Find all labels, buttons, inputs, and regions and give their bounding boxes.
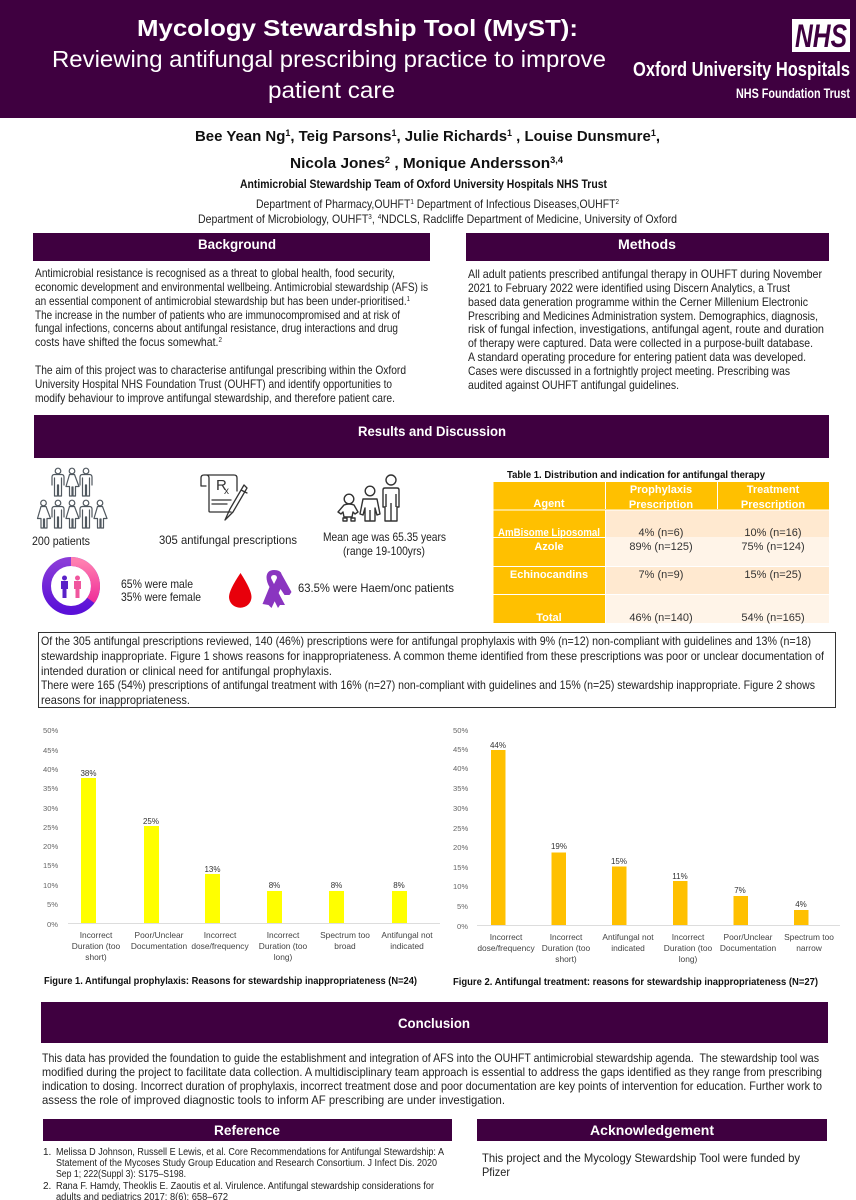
chart: figure 2 treatment: [453, 726, 840, 988]
panel: acknowledgement: [477, 1119, 827, 1179]
conclusion text: assess the role of improved diagnostic tools to inform AF prescribing are under investigation.: [42, 1094, 505, 1107]
methods text: A standard operating procedure for entering patient data was developed.: [468, 351, 806, 364]
y axis labels: 30%: [453, 804, 468, 813]
value labels: 7%: [734, 886, 746, 895]
category labels: Incorrect: [204, 930, 237, 940]
y axis labels: 5%: [457, 902, 468, 911]
icon: sex split donut: [46, 562, 96, 610]
table cells: 15% (n=25): [744, 569, 802, 581]
table cells: Prescription: [629, 499, 693, 511]
stat: sex split: 65% were male: [121, 578, 193, 591]
reference list: 1.: [43, 1147, 51, 1158]
methods text: Cases were discussed in a fortnightly project meeting. Prescribing was: [468, 365, 790, 378]
y axis labels: 25%: [453, 824, 468, 833]
value labels: 15%: [611, 857, 627, 866]
authors and affiliations: , Monique Andersson: [390, 155, 550, 172]
y axis labels: 15%: [43, 861, 58, 870]
category labels: short): [555, 954, 577, 964]
y axis labels: 50%: [453, 726, 468, 735]
category labels: broad: [334, 941, 356, 951]
poster title: [52, 15, 606, 103]
background text: economic development and environmental wellbeing. Antimicrobial stewardship (AFS) is: [35, 281, 428, 294]
value labels: 8%: [393, 881, 405, 890]
authors and affiliations: ,: [656, 128, 660, 145]
acknowledgement heading: [477, 1119, 827, 1141]
results and discussion heading: [34, 415, 829, 458]
authors and affiliations: 1: [651, 128, 656, 138]
conclusion heading: [41, 1002, 828, 1043]
acknowledgement text: [482, 1152, 800, 1179]
reference list: Statement of the Mycoses Study Group Education and Research Consortium. J Infect Dis. 2020: [56, 1158, 437, 1169]
authors and affiliations: 3,4: [550, 155, 563, 165]
reference heading: Reference: [214, 1123, 280, 1138]
background text: The aim of this project was to characterise antifungal prescribing within the Oxford: [35, 364, 406, 377]
category labels: indicated: [611, 943, 645, 953]
stat: mean age: (range 19-100yrs): [343, 545, 425, 558]
category labels: Spectrum too: [784, 932, 834, 942]
y axis labels: 40%: [43, 765, 58, 774]
stat: mean age: Mean age was 65.35 years: [323, 531, 446, 544]
table cells: Total: [536, 612, 562, 624]
authors and affiliations: Department of Infectious Diseases,OUHFT: [414, 198, 615, 211]
panel: background: [33, 233, 430, 405]
y axis labels: 30%: [43, 804, 58, 813]
poster title: patient care: [268, 77, 395, 103]
icon: group of patients: [38, 468, 107, 528]
background text: an essential component of antimicrobial stewardship but has been under-prioritised.: [35, 295, 464, 308]
category labels: Incorrect: [672, 932, 705, 942]
acknowledgement heading: Acknowledgement: [590, 1123, 715, 1138]
category labels: Poor/Unclear: [724, 932, 773, 942]
table cells: [494, 482, 829, 624]
value labels: 8%: [269, 881, 280, 890]
authors and affiliations: 2: [615, 199, 619, 206]
value labels: [490, 741, 807, 909]
stat: haem/onc patients: 63.5% were Haem/onc patients: [298, 582, 454, 595]
y axis labels: [43, 726, 58, 929]
background text: fungal infections, concerns about antifungal resistance, drug interactions and drug: [35, 322, 398, 335]
category labels: narrow: [796, 943, 823, 953]
conclusion text: [42, 1052, 822, 1107]
methods text: of therapy were captured. Data were collected in a purpose-built database.: [468, 337, 813, 350]
category labels: long): [679, 954, 698, 964]
table cells: 7% (n=9): [639, 569, 683, 581]
value labels: 13%: [204, 865, 221, 874]
NHS logo: [633, 18, 850, 101]
background text: 1: [407, 296, 410, 303]
authors and affiliations: 1: [410, 199, 414, 206]
authors and affiliations: ,: [372, 213, 378, 226]
authors and affiliations: Nicola Jones: [290, 155, 383, 172]
methods heading: [466, 233, 829, 261]
methods text: [468, 268, 824, 392]
authors and affiliations: , Teig Parsons: [290, 128, 391, 145]
background text: The increase in the number of patients who are immunocompromised and at risk of: [35, 309, 401, 322]
icon: prescription and pen: [201, 475, 247, 520]
authors and affiliations: Department of Microbiology, OUHFT: [198, 213, 385, 226]
poster title: Reviewing antifungal prescribing practice to improve: [52, 46, 606, 72]
background heading: [33, 233, 430, 261]
table cells: Agent: [533, 498, 565, 510]
category labels: dose/frequency: [477, 943, 535, 953]
authors and affiliations: , Louise Dunsmure: [512, 128, 651, 145]
authors and affiliations: 1: [391, 128, 396, 138]
category labels: Duration (too: [542, 943, 591, 953]
category labels: Documentation: [131, 941, 188, 951]
table cells: Azole: [534, 541, 564, 553]
icon: child, youth and adult figures: [338, 475, 399, 521]
stat: 200 patients: 200 patients: [32, 535, 90, 548]
icon: blood drop: [229, 573, 252, 608]
category labels: Incorrect: [550, 932, 583, 942]
category labels: dose/frequency: [191, 941, 249, 951]
panel: reference: [43, 1119, 452, 1200]
category labels: Duration (too: [72, 941, 121, 951]
panel: methods: [466, 233, 829, 392]
chart: figure 1 prophylaxis: [43, 726, 440, 987]
category labels: Antifungal not: [381, 930, 433, 940]
category labels: Spectrum too: [320, 930, 370, 940]
y axis labels: 20%: [43, 842, 58, 851]
methods text: audited against OUHFT antifungal guidelines.: [468, 379, 679, 392]
category labels: Incorrect: [80, 930, 113, 940]
y axis labels: 35%: [453, 784, 468, 793]
y axis labels: 10%: [43, 881, 58, 890]
y axis labels: 0%: [457, 922, 468, 931]
poster title: Mycology Stewardship Tool (MyST):: [137, 15, 578, 41]
y axis labels: 50%: [43, 726, 58, 735]
results summary box: intended duration or clinical need for antifungal prophylaxis.: [41, 665, 332, 678]
stat: prescriptions: 305 antifungal prescriptions: [159, 534, 297, 547]
authors and affiliations: NDCLS, Radcliffe Department of Medicine, University of Oxford: [381, 213, 677, 226]
methods text: based data generation programme within the Cerner Millenium Electronic: [468, 296, 808, 309]
background text: Antimicrobial resistance is recognised as a threat to global health, food security,: [35, 267, 395, 280]
y axis labels: 5%: [47, 900, 58, 909]
methods heading: Methods: [618, 237, 676, 252]
stat: prescriptions: R: [216, 477, 227, 494]
category labels: Documentation: [720, 943, 777, 953]
category labels: Duration (too: [664, 943, 713, 953]
y axis labels: 20%: [453, 843, 468, 852]
results summary box: Of the 305 antifungal prescriptions reviewed, 140 (46%) prescriptions were for antifungal prophylaxis with 9% (n=12) non-compliant with guidelines and 13% (n=18): [41, 635, 811, 648]
y axis labels: 45%: [453, 745, 468, 754]
stat: prescriptions: [159, 475, 297, 547]
results summary box: reasons for inappropriateness.: [41, 694, 190, 707]
category labels: indicated: [390, 941, 424, 951]
category labels: Antifungal not: [602, 932, 654, 942]
value labels: 8%: [331, 881, 342, 890]
background text: 2: [218, 337, 222, 344]
y axis labels: 0%: [47, 920, 58, 929]
table cells: Treatment: [747, 484, 800, 496]
y axis labels: 25%: [43, 823, 58, 832]
background text: University Hospital NHS Foundation Trust (OUHFT) and identify opportunities to: [35, 378, 392, 391]
stat: sex split: 35% were female: [121, 591, 201, 604]
conclusion text: indication to dosing. Incorrect duration of prophylaxis, incorrect treatment dose and poor documentation are key points of intervention for education. Further work to: [42, 1080, 822, 1093]
table cells: 10% (n=16): [744, 527, 802, 539]
conclusion heading: Conclusion: [398, 1016, 470, 1031]
y axis labels: 15%: [453, 863, 468, 872]
acknowledgement text: Pfizer: [482, 1166, 510, 1179]
reference list: 2.: [43, 1181, 51, 1192]
table cells: Prescription: [741, 499, 805, 511]
y axis labels: [453, 726, 468, 931]
category labels: Incorrect: [490, 932, 523, 942]
y axis labels: 10%: [453, 882, 468, 891]
authors and affiliations: 4: [378, 214, 381, 221]
table 1: [494, 469, 829, 624]
authors and affiliations: , Julie Richards: [396, 128, 507, 145]
reference list: [43, 1147, 444, 1200]
authors and affiliations: 2: [385, 155, 390, 165]
authors and affiliations: 1: [285, 128, 290, 138]
category labels: Poor/Unclear: [135, 930, 184, 940]
reference list: Sep 1; 222(Suppl 3): S175–S198.: [56, 1169, 186, 1180]
authors and affiliations: Department of Pharmacy,OUHFT: [256, 198, 427, 211]
stat: sex split: [46, 562, 201, 610]
reference heading: [43, 1119, 452, 1141]
y axis labels: 45%: [43, 746, 58, 755]
background text: [35, 267, 428, 405]
figure 2 caption: Figure 2. Antifungal treatment: reasons for stewardship inappropriateness (N=27): [453, 977, 818, 988]
table title: Table 1. Distribution and indication for antifungal therapy: [507, 469, 765, 481]
y axis labels: 35%: [43, 784, 58, 793]
panel: conclusion: [41, 1002, 828, 1107]
value labels: 38%: [80, 769, 97, 778]
icon: purple ribbon: [262, 570, 292, 608]
table cells: 54% (n=165): [741, 612, 805, 624]
value labels: 25%: [143, 817, 159, 826]
bars: [81, 778, 407, 923]
category labels: Incorrect: [267, 930, 300, 940]
background text: modify behaviour to improve antifungal stewardship, and therefore patient care.: [35, 392, 395, 405]
methods text: 2021 to February 2022 were identified using Discern Analytics, a Trust: [468, 282, 791, 295]
category labels: [72, 930, 433, 962]
authors and affiliations: 1: [507, 128, 512, 138]
table cells: 75% (n=124): [741, 541, 805, 553]
bars: [491, 750, 808, 925]
methods text: Prescribing and Medicines Administration system. Demographics, diagnosis,: [468, 310, 818, 323]
acknowledgement text: This project and the Mycology Stewardship Tool were funded by: [482, 1152, 800, 1165]
results and discussion heading: Results and Discussion: [358, 424, 506, 439]
category labels: Duration (too: [259, 941, 308, 951]
category labels: [477, 932, 834, 964]
category labels: short): [85, 952, 107, 962]
methods text: risk of fungal infection, investigations, antifungal agent, route and duration: [468, 323, 824, 336]
value labels: [80, 769, 405, 890]
stat: prescriptions: x: [224, 486, 229, 497]
background text: costs have shifted the focus somewhat.: [35, 336, 237, 349]
table cells: 46% (n=140): [629, 612, 693, 624]
reference list: Rana F. Hamdy, Theoklis E. Zaoutis et al. Virulence. Antifungal stewardship considerations for: [56, 1181, 435, 1192]
header banner: [0, 0, 856, 118]
reference list: Melissa D Johnson, Russell E Lewis, et al. Core Recommendations for Antifungal Stewardship: A: [56, 1147, 444, 1158]
background heading: Background: [198, 237, 276, 252]
table cells: 4% (n=6): [639, 527, 683, 539]
value labels: 19%: [551, 842, 567, 851]
value labels: 4%: [795, 900, 807, 909]
authors and affiliations: [195, 128, 677, 226]
stat: mean age: [323, 475, 446, 558]
value labels: 11%: [672, 872, 688, 881]
y axis labels: 40%: [453, 764, 468, 773]
authors and affiliations: Antimicrobial Stewardship Team of Oxford University Hospitals NHS Trust: [240, 179, 607, 191]
value labels: 44%: [490, 741, 506, 750]
results summary box: [38, 632, 836, 708]
table cells: Echinocandins: [510, 569, 588, 581]
methods text: All adult patients prescribed antifungal therapy in OUHFT during November: [468, 268, 822, 281]
table cells: 89% (n=125): [629, 541, 693, 553]
authors and affiliations: 3: [368, 214, 372, 221]
figure 1 caption: Figure 1. Antifungal prophylaxis: Reasons for stewardship inappropriateness (N=24): [44, 976, 417, 987]
stat: 200 patients: [32, 468, 107, 548]
category labels: long): [274, 952, 293, 962]
table cells: AmBisome Liposomal: [498, 527, 600, 539]
authors and affiliations: Bee Yean Ng: [195, 128, 286, 145]
table cells: Prophylaxis: [630, 484, 692, 496]
stat: haem/onc patients: [229, 570, 454, 608]
conclusion text: modified during the project to facilitate data collection. A multidisciplinary team approach is essential to address the gaps identified as they range from prescribing: [42, 1066, 822, 1079]
